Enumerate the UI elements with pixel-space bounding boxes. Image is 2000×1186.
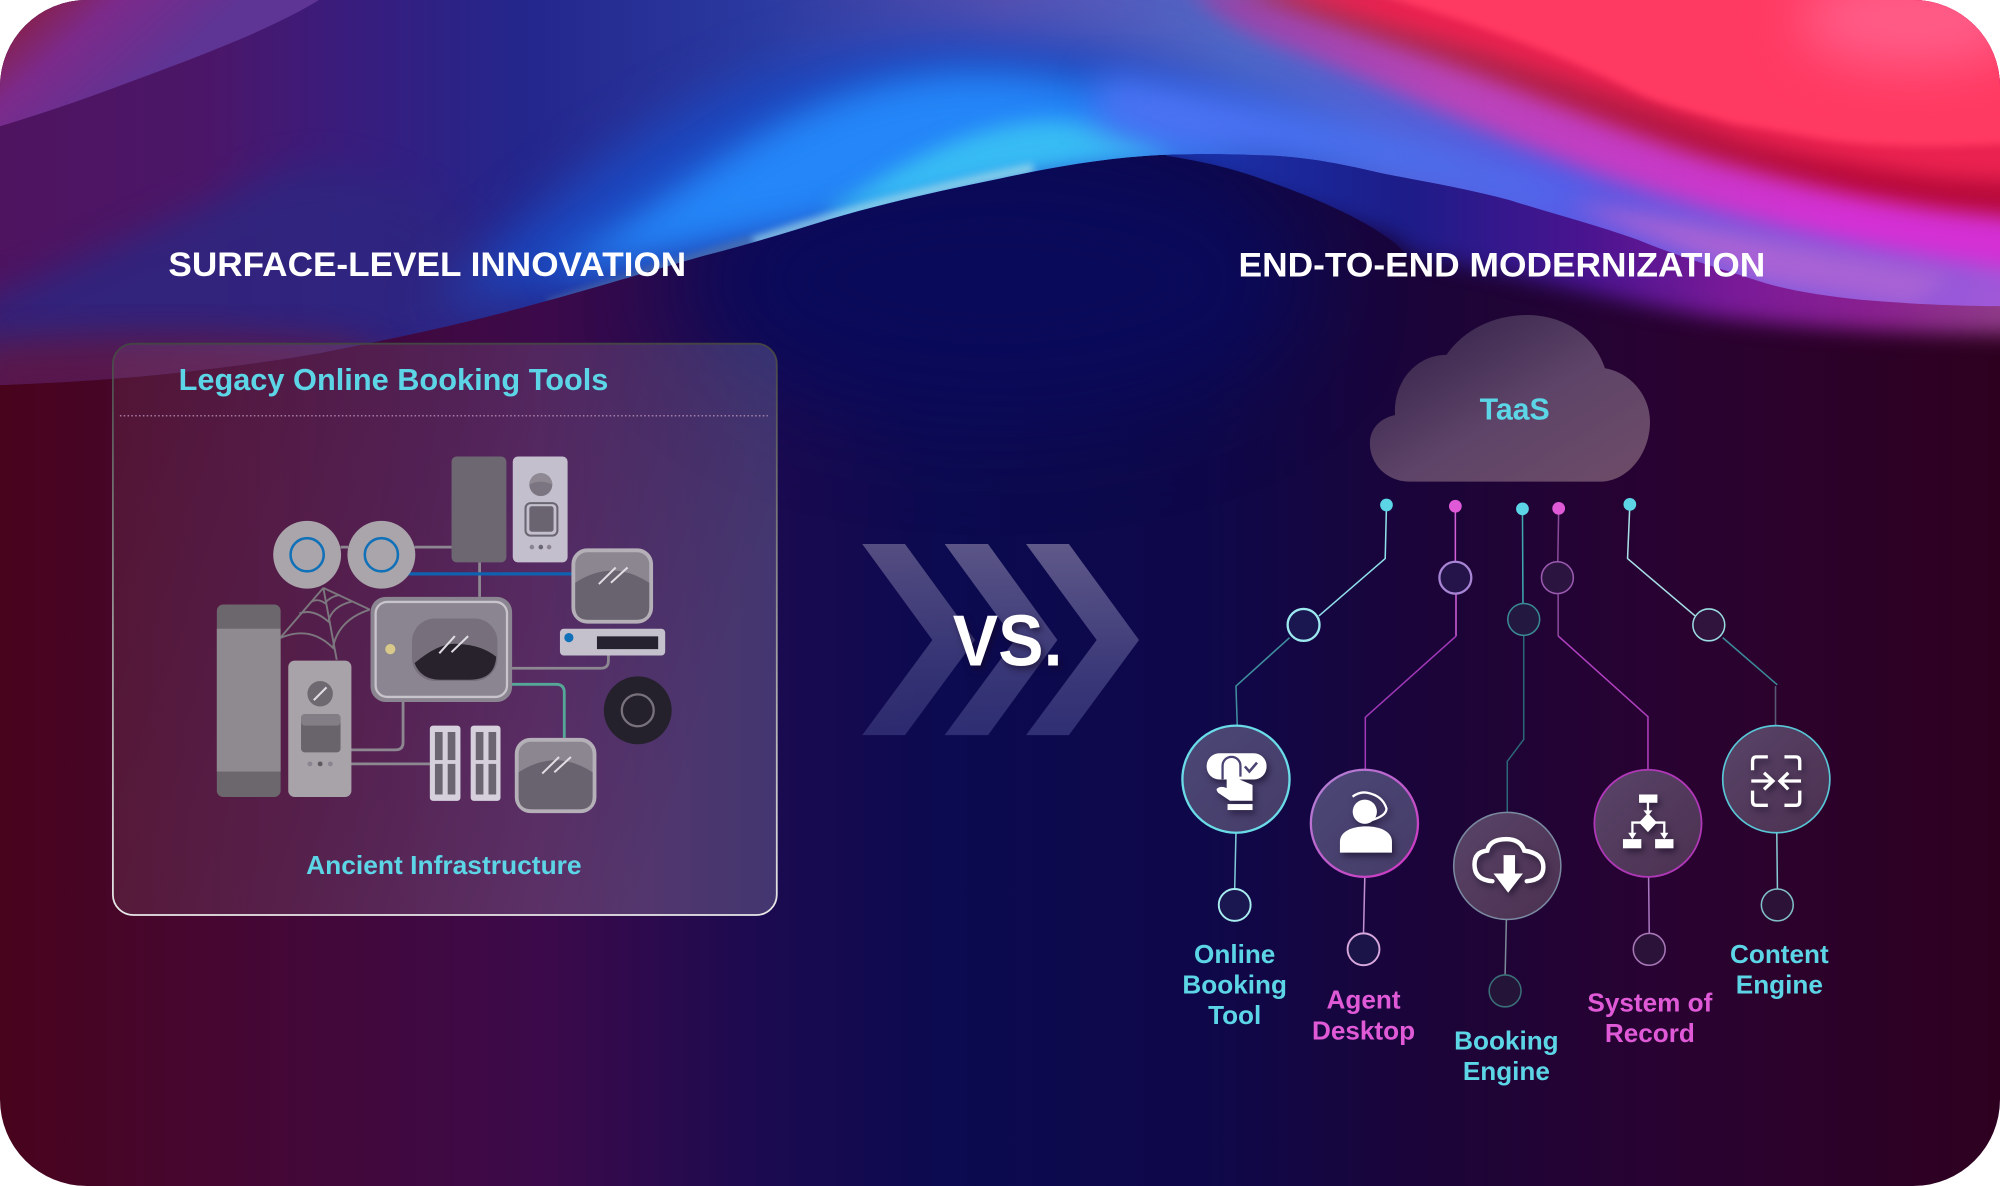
label: Record — [1605, 1018, 1695, 1048]
navy glow behind wave — [668, 162, 1305, 402]
black speaker — [604, 676, 672, 744]
label: Tool — [1208, 1000, 1261, 1030]
server panel — [513, 457, 568, 562]
left tower — [217, 604, 281, 797]
panel: legacy online booking tools — [113, 344, 777, 915]
branch: online booking tool — [1182, 499, 1393, 1030]
label: Booking — [1182, 969, 1287, 999]
ceiling speakers — [273, 521, 415, 589]
second tower — [288, 661, 351, 797]
label: Engine — [1463, 1056, 1550, 1086]
VS label: VS. — [953, 601, 1063, 682]
main box — [371, 597, 512, 702]
illustration: ancient infrastructure — [217, 457, 672, 811]
monitor lower — [517, 740, 595, 811]
label: Content — [1730, 939, 1829, 969]
label: Engine — [1736, 969, 1823, 999]
label: Online — [1194, 939, 1275, 969]
chevron arrows — [862, 544, 1139, 735]
label: System of — [1587, 987, 1713, 1017]
connector lines — [341, 547, 608, 764]
background wave — [0, 0, 2000, 408]
right band under wave — [1148, 128, 2000, 334]
heading: surface-level innovation: SURFACE-LEVEL INNOVATION — [168, 246, 686, 284]
icon: cloud download — [1474, 839, 1543, 893]
icon: flowchart — [1623, 794, 1673, 848]
racks — [430, 726, 501, 801]
icon: agent with headset — [1340, 792, 1392, 853]
cloud label: TaaS — [1480, 393, 1550, 427]
heading: end-to-end modernization: END-TO-END MODERNIZATION — [1239, 247, 1765, 285]
branch: agent desktop — [1311, 500, 1471, 1045]
panel title: Legacy Online Booking Tools — [179, 363, 608, 397]
icon: touch hand — [1207, 753, 1267, 810]
branch: content engine — [1623, 498, 1830, 999]
cloud: TaaS — [1370, 315, 1650, 482]
server tower — [452, 457, 506, 562]
monitor upper — [573, 550, 651, 622]
panel caption: Ancient Infrastructure — [306, 850, 582, 880]
label: Agent — [1327, 985, 1401, 1015]
icon: converge brackets — [1751, 757, 1801, 805]
disk player — [560, 629, 665, 655]
label: Desktop — [1312, 1015, 1415, 1045]
cobweb — [280, 588, 370, 660]
branch: booking engine — [1454, 502, 1561, 1086]
label: Booking — [1454, 1026, 1559, 1056]
branch: system of record — [1541, 502, 1713, 1048]
